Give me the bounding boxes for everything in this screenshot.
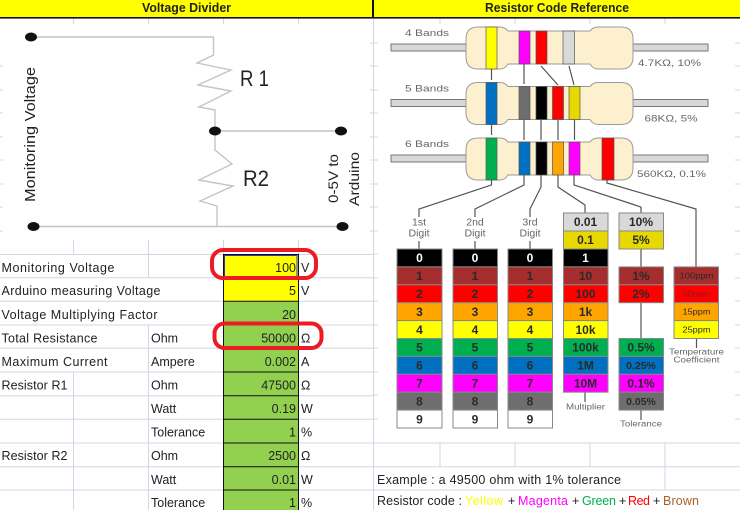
column: multiplier: 10 bbox=[579, 269, 592, 283]
column: tolerance: 0.05% bbox=[626, 396, 657, 408]
value column: 0.01 bbox=[272, 473, 296, 487]
row labels: Arduino measuring Voltage bbox=[2, 284, 161, 298]
column: multiplier: 100k bbox=[572, 340, 599, 354]
column: temperature coefficient: Temperature bbox=[669, 348, 725, 356]
row labels: Resistor R1 bbox=[2, 378, 68, 392]
column: 2nd digit: 5 bbox=[472, 340, 479, 354]
column: 3rd digit: Digit bbox=[519, 228, 541, 240]
value column: 50000 bbox=[261, 332, 296, 346]
column: 2nd digit: 0 bbox=[472, 251, 479, 265]
column: tolerance: 10% bbox=[629, 215, 653, 229]
resistor code text bbox=[377, 494, 699, 508]
column: 3rd digit: 9 bbox=[527, 412, 534, 426]
column: 2nd digit bbox=[453, 216, 498, 428]
column: 1st digit: Digit bbox=[408, 228, 430, 240]
column: 2nd digit: 7 bbox=[472, 376, 479, 390]
row labels bbox=[2, 261, 161, 463]
column: 3rd digit: 5 bbox=[527, 340, 534, 354]
callout: monitoring voltage highlight bbox=[212, 250, 316, 278]
resistor code text: Red bbox=[628, 494, 650, 508]
resistor: 5 bands: 68KΩ, 5% bbox=[644, 114, 698, 124]
column: temperature coefficient: 50ppm bbox=[682, 290, 711, 298]
column: 2nd digit: 2nd bbox=[466, 216, 484, 228]
row labels: Voltage Multiplying Factor bbox=[2, 308, 158, 322]
column: multiplier: 0.1 bbox=[577, 233, 594, 247]
resistor: 5 bands: 5 Bands bbox=[405, 84, 449, 94]
resistor: 4 bands: 4 Bands bbox=[405, 28, 449, 39]
column: 1st digit: 1 bbox=[416, 269, 423, 283]
column: tolerance: 2% bbox=[632, 287, 650, 301]
column: tolerance: 5% bbox=[632, 233, 650, 247]
column: tolerance bbox=[619, 213, 664, 428]
column: 1st digit: 9 bbox=[416, 412, 423, 426]
resistor code text: Yellow bbox=[465, 494, 504, 508]
column: 3rd digit: 4 bbox=[527, 323, 534, 337]
quantity labels bbox=[151, 332, 205, 510]
resistor code text: Magenta bbox=[518, 494, 568, 508]
value column bbox=[223, 254, 299, 510]
resistor: 5 bands bbox=[391, 82, 708, 124]
column: 1st digit bbox=[397, 216, 442, 428]
column: 2nd digit: 8 bbox=[472, 394, 479, 408]
quantity labels: Tolerance bbox=[151, 496, 205, 510]
value column: 5 bbox=[289, 284, 296, 298]
quantity labels: Ampere bbox=[151, 355, 195, 369]
column: multiplier: 10k bbox=[575, 323, 596, 337]
resistor: 4 bands bbox=[391, 27, 708, 69]
column: 3rd digit: 6 bbox=[527, 358, 534, 372]
voltage divider schematic: 0-5V to bbox=[325, 154, 341, 203]
column: 2nd digit: 6 bbox=[472, 358, 479, 372]
voltage divider schematic: R 1 bbox=[240, 66, 269, 91]
column: 3rd digit: 3 bbox=[527, 305, 534, 319]
resistor code text: Brown bbox=[663, 494, 699, 508]
value column: 1 bbox=[289, 426, 296, 440]
row labels: Total Resistance bbox=[2, 332, 98, 346]
column: 1st digit: 7 bbox=[416, 376, 423, 390]
header: Resistor Code Reference bbox=[374, 0, 740, 17]
unit labels: Ω bbox=[301, 449, 310, 463]
column: 2nd digit: 2 bbox=[472, 287, 479, 301]
column: tolerance: 0.1% bbox=[627, 376, 655, 390]
column: 3rd digit: 8 bbox=[527, 394, 534, 408]
column: 1st digit: 5 bbox=[416, 340, 423, 354]
column: temperature coefficient: 15ppm bbox=[682, 308, 711, 316]
voltage divider schematic bbox=[22, 32, 362, 231]
column: 3rd digit: 2 bbox=[527, 287, 534, 301]
voltage divider schematic: Monitoring Voltage bbox=[22, 67, 39, 202]
callout: total resistance highlight bbox=[214, 324, 322, 348]
quantity labels: Tolerance bbox=[151, 426, 205, 440]
column: 1st digit: 2 bbox=[416, 287, 423, 301]
unit labels: % bbox=[301, 496, 312, 510]
column: multiplier: 10M bbox=[574, 376, 597, 390]
column: tolerance: 0.5% bbox=[627, 340, 655, 354]
column: temperature coefficient bbox=[669, 267, 725, 364]
example text: Example : a 49500 ohm with 1% tolerance bbox=[377, 473, 621, 487]
row labels: Maximum Current bbox=[2, 355, 108, 369]
value column: 47500 bbox=[261, 378, 296, 392]
resistor code text: + bbox=[653, 494, 660, 508]
quantity labels: Watt bbox=[151, 402, 177, 416]
quantity labels: Ohm bbox=[151, 449, 178, 463]
column: multiplier: 0.01 bbox=[574, 215, 598, 229]
column: 2nd digit: 3 bbox=[472, 305, 479, 319]
value column: 1 bbox=[289, 496, 296, 510]
column: temperature coefficient: 100ppm bbox=[680, 272, 714, 280]
resistor code text: + bbox=[619, 494, 626, 508]
header: Voltage Divider bbox=[0, 0, 372, 17]
unit labels: V bbox=[301, 261, 310, 275]
column: 2nd digit: 4 bbox=[472, 323, 479, 337]
column: 1st digit: 3 bbox=[416, 305, 423, 319]
resistor: 6 bands: 6 Bands bbox=[405, 139, 449, 150]
row labels: Monitoring Voltage bbox=[2, 261, 115, 275]
voltage divider schematic: R2 bbox=[243, 166, 269, 191]
quantity labels: Ohm bbox=[151, 332, 178, 346]
resistor code text: + bbox=[572, 494, 579, 508]
value column: 20 bbox=[282, 308, 296, 322]
connector lines bbox=[419, 64, 696, 420]
column: 2nd digit: Digit bbox=[464, 228, 486, 240]
resistor band diagram bbox=[391, 27, 708, 420]
column: multiplier: 1 bbox=[582, 251, 589, 265]
row labels: Resistor R2 bbox=[2, 449, 68, 463]
quantity labels: Ohm bbox=[151, 378, 178, 392]
resistor code text: Green bbox=[582, 494, 616, 508]
column: tolerance: Tolerance bbox=[620, 420, 663, 428]
column: multiplier: 1M bbox=[577, 358, 594, 372]
header: Resistor Code Reference: Resistor Code Reference bbox=[485, 1, 629, 15]
column: 3rd digit bbox=[508, 216, 552, 428]
value column: 0.002 bbox=[265, 355, 296, 369]
unit labels: A bbox=[301, 355, 310, 369]
unit labels: % bbox=[301, 426, 312, 440]
resistor: 6 bands bbox=[391, 138, 708, 180]
calculator table bbox=[2, 254, 313, 510]
value column: 0.19 bbox=[272, 402, 296, 416]
unit labels: V bbox=[301, 284, 310, 298]
unit labels: Ω bbox=[301, 378, 310, 392]
column: 2nd digit: 9 bbox=[472, 412, 479, 426]
column: temperature coefficient: Coefficient bbox=[674, 356, 720, 364]
column: multiplier: 1k bbox=[579, 305, 592, 319]
resistor: 4 bands: 4.7KΩ, 10% bbox=[638, 58, 702, 69]
column: 1st digit: 6 bbox=[416, 358, 423, 372]
column: temperature coefficient: 25ppm bbox=[682, 326, 711, 334]
column: multiplier bbox=[564, 213, 608, 412]
column: 1st digit: 8 bbox=[416, 394, 423, 408]
value column: 100 bbox=[275, 261, 296, 275]
column: 1st digit: 1st bbox=[412, 216, 426, 228]
voltage divider schematic: Arduino bbox=[346, 152, 362, 206]
resistor code text: + bbox=[508, 494, 515, 508]
column: 3rd digit: 3rd bbox=[522, 216, 538, 228]
column: 2nd digit: 1 bbox=[472, 269, 479, 283]
column: 3rd digit: 0 bbox=[527, 251, 534, 265]
value column: 2500 bbox=[268, 449, 296, 463]
column: 1st digit: 4 bbox=[416, 323, 423, 337]
header: Voltage Divider: Voltage Divider bbox=[142, 1, 231, 15]
unit labels bbox=[301, 261, 313, 510]
column: multiplier: Multiplier bbox=[566, 402, 605, 412]
column: 3rd digit: 1 bbox=[527, 269, 534, 283]
column: 3rd digit: 7 bbox=[527, 376, 534, 390]
resistor code text: Resistor code : bbox=[377, 494, 462, 508]
quantity labels: Watt bbox=[151, 473, 177, 487]
column: multiplier: 100 bbox=[575, 287, 596, 301]
column: tolerance: 1% bbox=[632, 269, 650, 283]
unit labels: W bbox=[301, 473, 313, 487]
column: tolerance: 0.25% bbox=[626, 360, 657, 372]
unit labels: Ω bbox=[301, 332, 310, 346]
resistor: 6 bands: 560KΩ, 0.1% bbox=[637, 169, 707, 180]
column: 1st digit: 0 bbox=[416, 251, 423, 265]
unit labels: W bbox=[301, 402, 313, 416]
